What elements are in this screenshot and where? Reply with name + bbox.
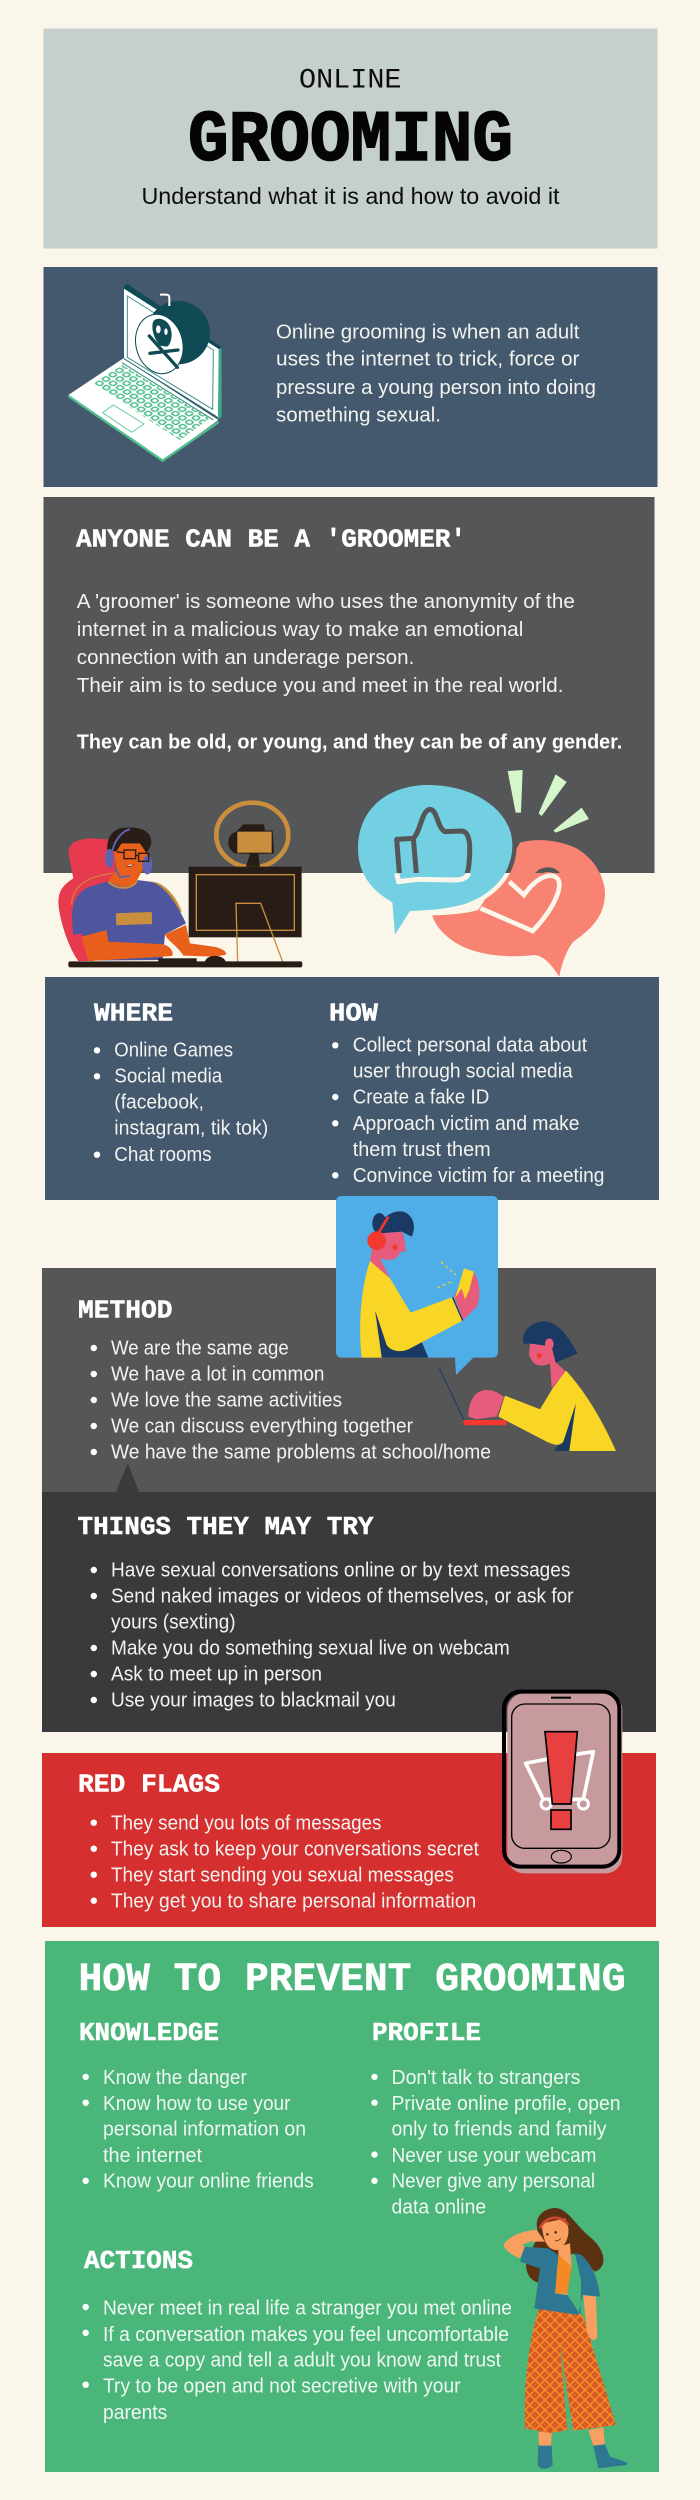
list: how: user through social media xyxy=(353,1061,574,1083)
definition text: uses the internet to trick, force or xyxy=(276,349,580,371)
list: knowledge: Know the danger xyxy=(103,2067,247,2089)
definition text: Online grooming is when an adult xyxy=(276,321,580,343)
list: where: (facebook, xyxy=(114,1092,204,1114)
list: actions xyxy=(82,2298,512,2424)
list: profile: Never use your webcam xyxy=(392,2145,596,2167)
body text: internet in a malicious way to make an emotional xyxy=(77,619,523,641)
list: things they may try: Ask to meet up in person xyxy=(111,1664,322,1686)
heading: ONLINE: ONLINE xyxy=(299,65,402,96)
list: method: We love the same activities xyxy=(111,1390,342,1412)
list: things they may try xyxy=(91,1560,574,1712)
list: how: them trust them xyxy=(353,1139,491,1161)
subtitle: Understand what it is and how to avoid it xyxy=(142,183,560,209)
list: where: Chat rooms xyxy=(114,1144,212,1166)
illustration: like and heart speech bubbles xyxy=(358,770,605,977)
list: actions: save a copy and tell a adult you know and trust xyxy=(103,2350,501,2372)
panel: things they may try xyxy=(42,1463,656,1732)
heading: GROOMING: GROOMING xyxy=(188,100,513,182)
definition text: pressure a young person into doing xyxy=(276,377,596,399)
heading: method: METHOD xyxy=(78,1297,172,1326)
body text: connection with an underage person. xyxy=(77,647,414,669)
panel: anyone can be a groomer xyxy=(44,497,654,873)
bold statement: They can be old, or young, and they can be of any gender. xyxy=(77,731,622,753)
list: where: instagram, tik tok) xyxy=(114,1118,268,1140)
heading: how to prevent grooming: HOW TO PREVENT GROOMING xyxy=(78,1958,626,2003)
list: red flags xyxy=(91,1812,479,1912)
list: actions: Never meet in real life a stranger you met online xyxy=(103,2298,512,2320)
list: knowledge: Know how to use your xyxy=(103,2093,291,2115)
panel: how to prevent grooming xyxy=(45,1941,659,2472)
list: profile: Never give any personal xyxy=(392,2171,595,2193)
panel: definition xyxy=(44,267,658,487)
illustration: thoughtful woman xyxy=(503,2208,627,2469)
blue thumb bubble xyxy=(358,785,512,935)
list: things they may try: yours (sexting) xyxy=(111,1612,236,1634)
list: profile xyxy=(371,2067,620,2218)
panel: red flags xyxy=(42,1753,656,1927)
list: profile: Private online profile, open xyxy=(392,2093,620,2115)
illustration: two people chatting xyxy=(336,1196,616,1451)
list: actions: Try to be open and not secretive with your xyxy=(103,2376,461,2398)
list: method: We have the same problems at school/home xyxy=(111,1442,491,1464)
panel: where and how xyxy=(45,977,659,1200)
heading: actions: ACTIONS xyxy=(84,2247,193,2276)
how column xyxy=(329,999,604,1187)
heading: where: WHERE xyxy=(94,999,173,1028)
green sparks xyxy=(508,770,589,833)
heading: knowledge: KNOWLEDGE xyxy=(79,2019,219,2048)
definition text: something sexual. xyxy=(276,405,441,427)
illustration: gamer at computer xyxy=(58,803,302,967)
list: where xyxy=(94,1040,268,1166)
icon: laptop with skull bomb xyxy=(68,284,222,461)
heading: things they may try: THINGS THEY MAY TRY xyxy=(78,1513,374,1542)
speech bubble xyxy=(336,1196,498,1375)
list: knowledge xyxy=(82,2067,314,2193)
list: red flags: They get you to share personal information xyxy=(111,1890,476,1912)
body text xyxy=(77,591,575,697)
person with phone xyxy=(360,1211,479,1358)
list: where: Online Games xyxy=(114,1040,233,1062)
column: actions xyxy=(82,2247,512,2424)
list: where: Social media xyxy=(114,1066,223,1088)
list: method: We can discuss everything together xyxy=(111,1416,413,1438)
list: red flags: They send you lots of messages xyxy=(111,1812,382,1834)
column: profile xyxy=(371,2019,620,2218)
list: red flags: They start sending you sexual messages xyxy=(111,1864,454,1886)
list: knowledge: Know your online friends xyxy=(103,2171,314,2193)
panel: method xyxy=(42,1268,656,1492)
list: profile: data online xyxy=(392,2196,486,2218)
heading: profile: PROFILE xyxy=(372,2019,481,2048)
heading: ANYONE CAN BE A 'GROOMER' xyxy=(76,526,466,555)
list: knowledge: personal information on xyxy=(103,2119,306,2141)
where column xyxy=(94,999,268,1166)
body text: Their aim is to seduce you and meet in the real world. xyxy=(77,675,563,697)
list: how: Create a fake ID xyxy=(353,1087,489,1109)
list: how: Approach victim and make xyxy=(353,1113,580,1135)
panel: title xyxy=(44,28,658,248)
column: knowledge xyxy=(79,2019,314,2193)
list: method xyxy=(91,1338,491,1464)
list: profile: only to friends and family xyxy=(392,2119,606,2141)
list: method: We are the same age xyxy=(111,1338,289,1360)
definition text xyxy=(276,321,596,427)
list: profile: Don't talk to strangers xyxy=(392,2067,580,2089)
body text: A 'groomer' is someone who uses the anonymity of the xyxy=(77,591,575,613)
list: knowledge: the internet xyxy=(103,2145,202,2167)
heading: how: HOW xyxy=(329,999,379,1028)
icon: phone with warning xyxy=(504,1692,622,1873)
list: how: Collect personal data about xyxy=(353,1035,588,1057)
list: how xyxy=(332,1035,604,1187)
list: things they may try: Send naked images or videos of themselves, or ask for xyxy=(111,1586,574,1608)
list: things they may try: Make you do something sexual live on webcam xyxy=(111,1638,510,1660)
list: method: We have a lot in common xyxy=(111,1364,324,1386)
list: red flags: They ask to keep your conversations secret xyxy=(111,1838,479,1860)
red heart bubble xyxy=(432,840,605,977)
list: things they may try: Use your images to blackmail you xyxy=(111,1690,396,1712)
list: how: Convince victim for a meeting xyxy=(353,1165,604,1187)
arrow pointer xyxy=(116,1463,139,1492)
list: actions: parents xyxy=(103,2402,167,2424)
heading: red flags: RED FLAGS xyxy=(78,1770,220,1799)
person with laptop xyxy=(439,1321,616,1451)
list: things they may try: Have sexual conversations online or by text messages xyxy=(111,1560,570,1582)
list: actions: If a conversation makes you feel uncomfortable xyxy=(103,2324,509,2346)
